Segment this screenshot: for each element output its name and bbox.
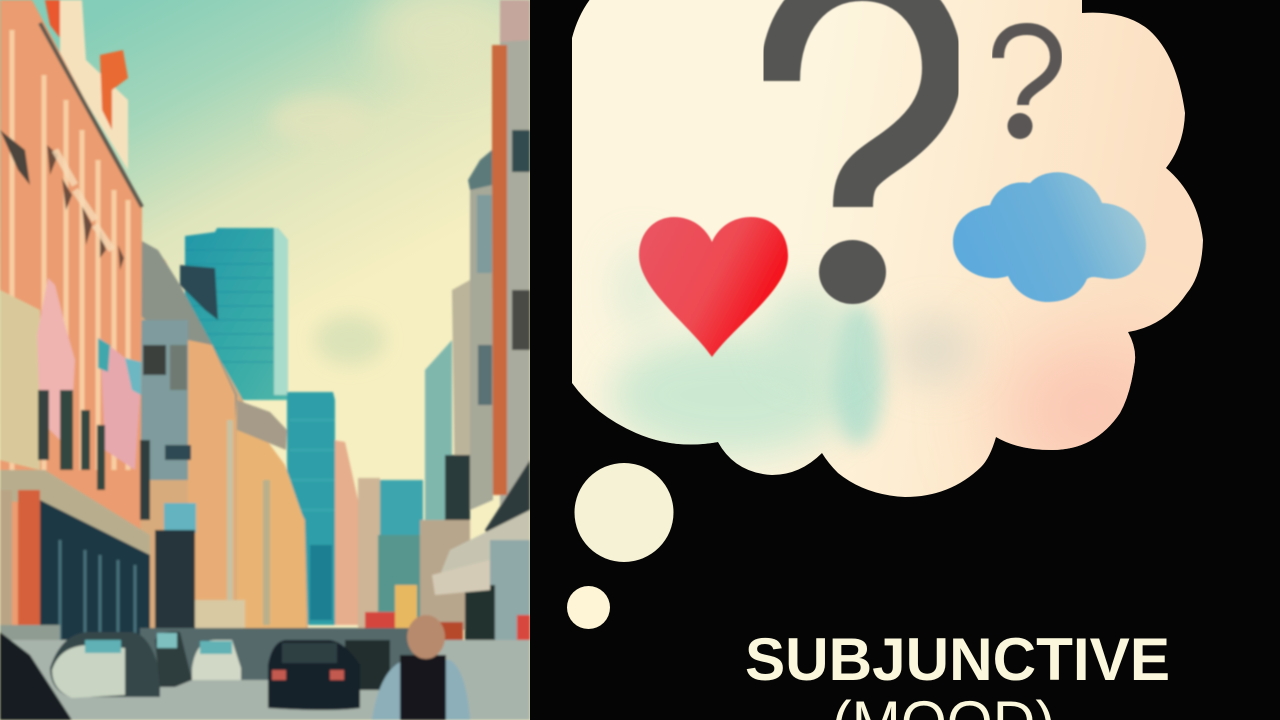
watercolor wash: [610, 245, 1180, 480]
icon: small question mark: [998, 29, 1056, 139]
sky: [0, 0, 530, 720]
street: [0, 640, 530, 720]
right buildings: [420, 0, 530, 720]
cars: [0, 628, 430, 720]
left large facade: [0, 0, 150, 645]
thought bubble: small circle: [567, 586, 610, 629]
title: SUBJUNCTIVE: [745, 626, 1170, 693]
thought bubble: medium circle: [574, 463, 674, 562]
distant buildings: [333, 440, 426, 636]
pedestrian: [372, 615, 470, 720]
icon: large question mark: [780, 0, 942, 304]
icon: blue cloud: [953, 172, 1146, 302]
left middle buildings: [140, 240, 308, 645]
icon: red heart: [639, 217, 788, 357]
teal tower near: [185, 228, 288, 400]
street photo panel: [0, 0, 530, 720]
thought bubble: [572, 0, 1203, 497]
teal tower far: [287, 392, 335, 625]
